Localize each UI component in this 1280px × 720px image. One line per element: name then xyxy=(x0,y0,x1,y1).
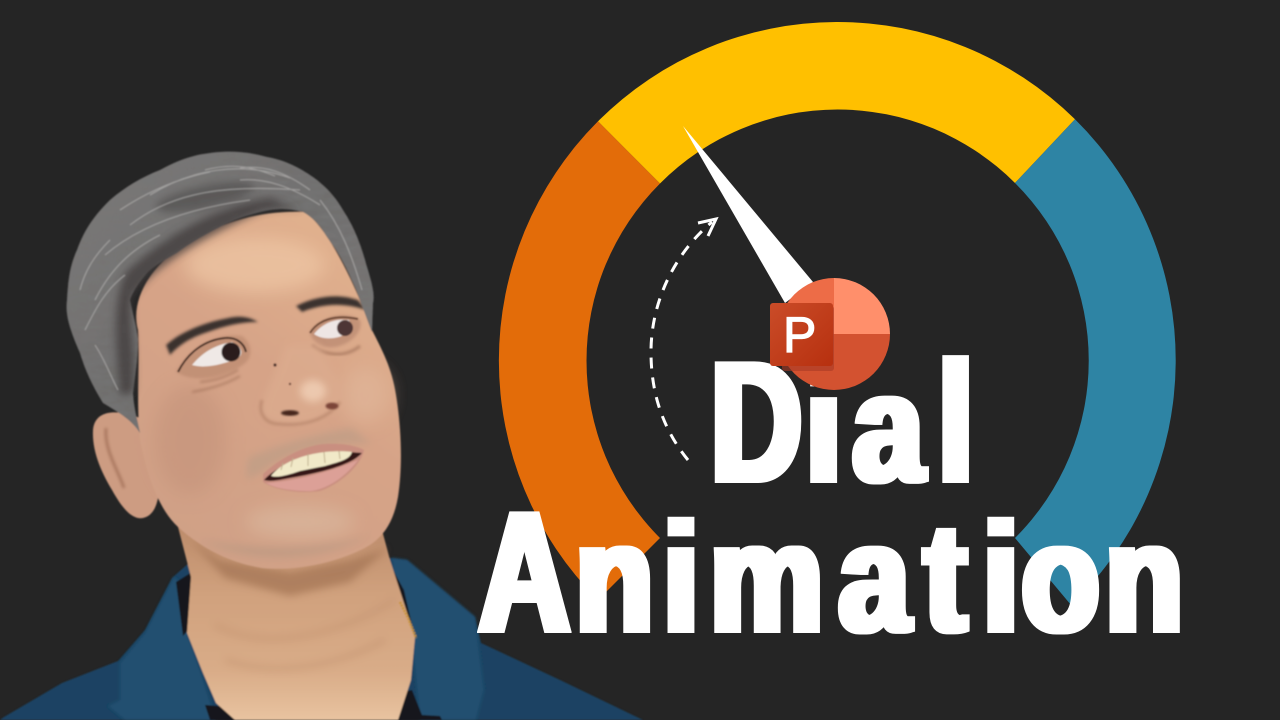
hair xyxy=(67,152,374,433)
undershirt xyxy=(176,565,442,720)
right eye xyxy=(310,315,361,354)
stubble above lip xyxy=(246,428,372,480)
shirt xyxy=(0,558,643,720)
dial needle xyxy=(683,126,813,303)
cheek tones xyxy=(154,385,226,495)
stubble near chin xyxy=(200,535,372,557)
dark hair root shading xyxy=(116,198,305,395)
title: Dial: Dial xyxy=(711,327,973,518)
nose xyxy=(261,345,344,424)
dashed motion arrow xyxy=(651,219,716,460)
icon: PowerPoint logo: P xyxy=(783,307,816,363)
left eye xyxy=(176,335,250,392)
eyebrows xyxy=(166,296,366,355)
neck creases xyxy=(215,600,395,668)
face xyxy=(136,212,401,569)
dial gauge xyxy=(499,22,1176,605)
presenter portrait xyxy=(0,152,643,720)
dial segment: orange xyxy=(499,121,660,600)
title: Animation: Animation xyxy=(479,477,1183,668)
ear xyxy=(93,412,158,518)
dial segment: blue xyxy=(1015,119,1176,605)
teeth xyxy=(271,451,352,477)
neck xyxy=(178,527,415,720)
lips xyxy=(263,444,364,492)
forehead highlight xyxy=(185,237,325,293)
collar highlights xyxy=(108,558,484,720)
neck shadow under chin xyxy=(190,540,388,596)
grey strands xyxy=(80,166,362,390)
chin highlight xyxy=(245,506,355,538)
arrow head xyxy=(698,219,716,236)
icon: PowerPoint logo xyxy=(770,278,890,390)
necklace xyxy=(400,602,416,638)
mouth xyxy=(263,444,364,492)
dial segment: yellow xyxy=(598,22,1075,184)
nose outline shadow xyxy=(261,400,340,424)
dark patch on crown xyxy=(154,176,256,218)
